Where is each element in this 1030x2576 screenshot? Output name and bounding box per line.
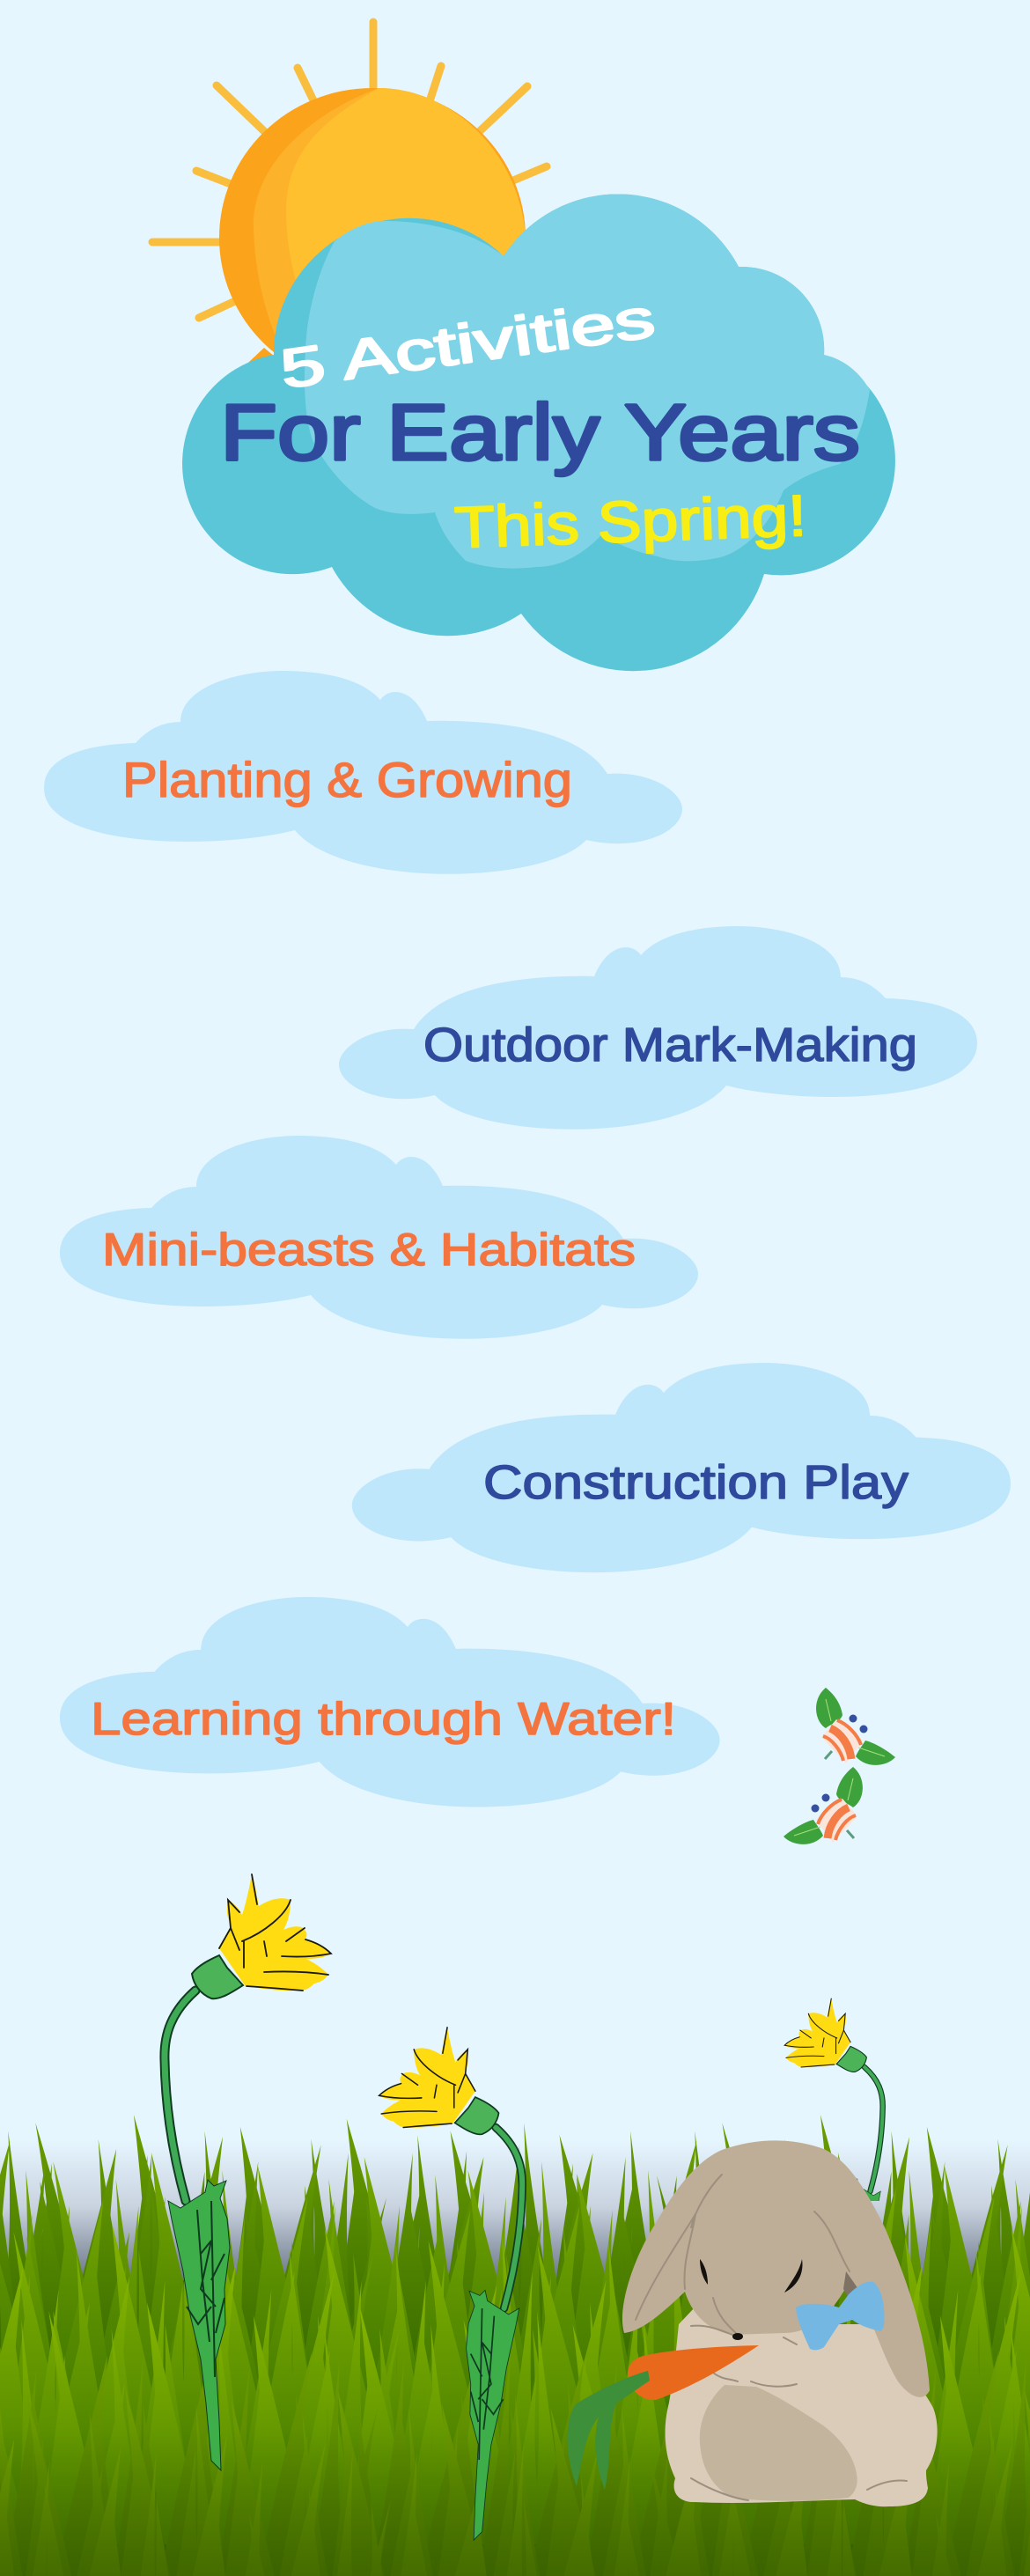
icon: flower 3 [784, 1998, 886, 2201]
bunny head and ears [622, 2140, 930, 2397]
icon: flower 2 [379, 2028, 522, 2540]
carrot leaves [567, 2371, 650, 2490]
title line 3: This Spring! [453, 482, 807, 560]
icon: sun [152, 22, 547, 387]
bunny body [666, 2307, 938, 2506]
bunny collar [843, 2271, 858, 2300]
panel: Mini-beasts and Habitats [60, 1136, 698, 1339]
bunny belly patch [700, 2385, 857, 2501]
icon: flower 1 [165, 1874, 331, 2470]
icon: blue bow [796, 2282, 884, 2350]
bunny nose [732, 2333, 743, 2340]
cloud highlight [305, 194, 870, 569]
panel: Learning through Water: Learning through Water! [91, 1694, 676, 1745]
panel: Construction Play: Construction Play [483, 1456, 909, 1509]
panel: Construction Play [352, 1363, 1011, 1572]
cloud base [182, 194, 895, 671]
icon: bunny with carrot [567, 2140, 938, 2506]
bunny eyes [700, 2259, 802, 2293]
panel: Planting and Growing: Planting & Growing [122, 752, 572, 807]
panel: Outdoor Mark-Making: Outdoor Mark-Making [423, 1019, 917, 1071]
panel: Mini-beasts and Habitats: Mini-beasts & Habitats [102, 1225, 636, 1276]
panel: Outdoor Mark-Making [339, 926, 977, 1130]
icon: carrot [628, 2345, 759, 2400]
main title cloud [182, 194, 895, 671]
panel: Planting and Growing [44, 671, 682, 874]
icon: bee 1 [816, 1688, 895, 1765]
icon: bee 2 [784, 1767, 863, 1844]
grass [0, 2115, 1030, 2576]
ear and face lines [636, 2175, 907, 2500]
panel: Learning through Water [60, 1597, 720, 1807]
title line 2: For Early Years [220, 389, 860, 477]
title line 1: 5 Activities [276, 288, 658, 401]
